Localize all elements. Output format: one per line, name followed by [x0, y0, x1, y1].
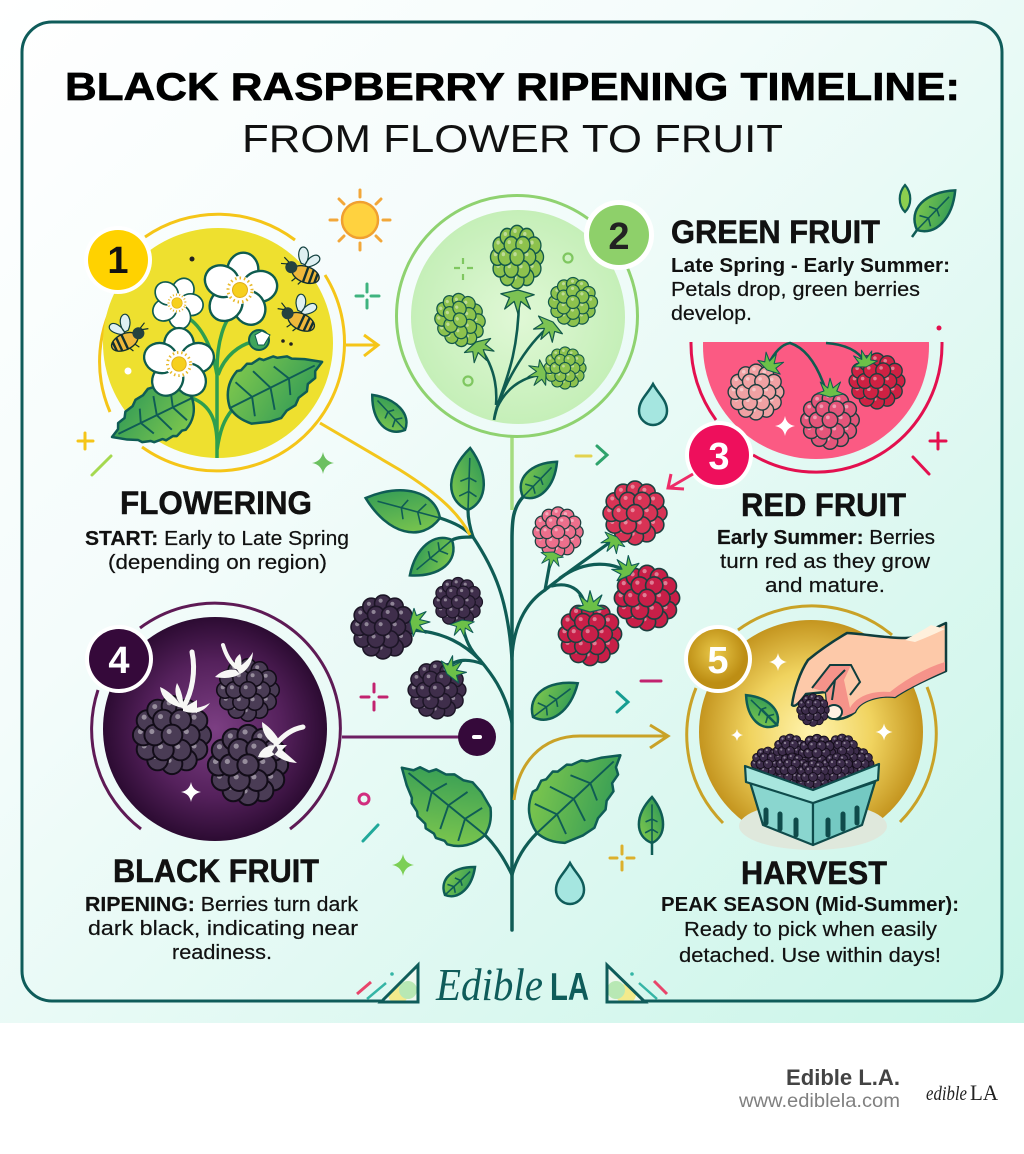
connector: tree to harvest — [514, 725, 668, 800]
title — [65, 66, 960, 161]
heading and text: black fruit: dark black, indicating near — [88, 917, 358, 940]
heading and text: red fruit: RED FRUIT — [741, 487, 906, 523]
pink half disc — [703, 342, 929, 459]
stems — [478, 300, 551, 420]
heading and text: red fruit: turn red as they grow — [720, 550, 930, 573]
footer credit: Edible L.A. — [786, 1065, 900, 1090]
heading and text: green fruit: Late Spring - Early Summer: — [671, 255, 950, 277]
badge 3: 3 — [708, 436, 730, 478]
heading and text: green fruit: Petals drop, green berries — [671, 278, 920, 301]
badge 1 — [84, 226, 152, 294]
bud — [249, 330, 269, 350]
bees — [276, 242, 327, 291]
icon: water drop — [639, 384, 667, 425]
berries — [490, 225, 544, 289]
green disc — [411, 210, 625, 424]
gold disc — [699, 620, 923, 820]
title: BLACK RASPBERRY RIPENING TIMELINE: — [65, 66, 960, 109]
heading and text: black fruit — [85, 853, 359, 964]
heading and text: harvest: Ready to pick when easily — [684, 918, 938, 941]
connector: flowering to tree — [320, 423, 470, 535]
heading and text: red fruit: Early Summer: Berries — [717, 526, 935, 549]
badge 5 — [684, 625, 752, 693]
heading and text: harvest: PEAK SEASON (Mid-Summer): — [661, 894, 959, 916]
shadow — [739, 802, 887, 850]
heading and text: green fruit: develop. — [671, 302, 752, 325]
tree red berries — [533, 481, 680, 666]
icon: leaves top right — [900, 180, 965, 239]
heading and text: flowering — [85, 485, 349, 574]
step 4: black fruit illustration — [92, 603, 340, 841]
heading and text: flowering: (depending on region) — [108, 551, 327, 574]
heading and text: harvest: detached. Use within days! — [679, 944, 941, 967]
purple disc — [103, 617, 327, 841]
arrow: step 3 to tree — [668, 474, 693, 489]
lower berry — [208, 725, 288, 805]
berries — [728, 364, 784, 420]
yellow disc — [103, 228, 333, 458]
footer logo — [926, 1080, 998, 1105]
heading and text: flowering: START: Early to Late Spring — [85, 527, 349, 550]
badge 4 — [85, 625, 153, 693]
step 2: green fruit illustration — [396, 196, 638, 436]
footer logo: LA — [970, 1080, 998, 1105]
left logo triangle — [381, 965, 418, 1004]
sparkles — [769, 653, 787, 671]
badge 5: 5 — [707, 640, 729, 682]
hand — [792, 623, 946, 719]
stems — [188, 315, 252, 458]
ring — [396, 196, 638, 436]
icon: sun — [330, 190, 390, 250]
heading and text: green fruit: GREEN FRUIT — [671, 214, 880, 250]
title: FROM FLOWER TO FRUIT — [242, 118, 783, 161]
icon: small leaf — [362, 387, 413, 439]
ring — [687, 606, 936, 823]
logo: Edible LA: LA — [550, 966, 589, 1009]
ring — [691, 342, 942, 472]
small leaf — [738, 688, 784, 734]
ring — [100, 214, 345, 471]
flowers — [194, 247, 285, 335]
upper berry — [217, 659, 279, 721]
basket — [745, 764, 879, 845]
connector: green fruit to tree — [510, 437, 514, 510]
picked berry — [797, 694, 829, 726]
step 3: red fruit illustration — [690, 342, 944, 474]
left berry — [133, 696, 211, 774]
connector: black fruit to tree — [342, 718, 496, 756]
logo: Edible LA — [356, 962, 668, 1004]
badge 2 — [584, 200, 654, 270]
basket berries — [751, 747, 785, 781]
badge 1: 1 — [107, 240, 129, 282]
badge 2: 2 — [608, 216, 630, 258]
badge 4: 4 — [108, 640, 130, 682]
heading and text: green fruit — [671, 214, 950, 325]
footer logo: edible — [926, 1083, 967, 1105]
right logo triangle — [607, 965, 645, 1004]
footer credit — [738, 1065, 900, 1112]
heading and text: black fruit: readiness. — [172, 941, 272, 964]
icon: water drop lower — [556, 863, 584, 904]
heading and text: harvest — [661, 855, 959, 967]
step 1: flowering illustration — [100, 214, 345, 471]
heading and text: black fruit: BLACK FRUIT — [113, 853, 319, 889]
heading and text: flowering: FLOWERING — [120, 485, 312, 521]
ring — [92, 603, 340, 829]
stems — [768, 343, 865, 388]
heading and text: black fruit: RIPENING: Berries turn dark — [85, 893, 359, 916]
tree black berries — [351, 578, 482, 719]
footer credit: www.ediblela.com — [738, 1090, 900, 1112]
heading and text: red fruit: and mature. — [765, 574, 885, 597]
badge 3 — [685, 421, 753, 489]
tree leaves — [360, 447, 663, 902]
leaves — [216, 333, 336, 437]
tree stems and branches — [412, 497, 632, 930]
heading and text: harvest: HARVEST — [741, 855, 887, 891]
arrow: step 1 to step 2 — [346, 335, 378, 356]
logo: Edible LA: Edible — [435, 959, 543, 1010]
heading and text: red fruit — [717, 487, 935, 597]
decorative accents — [78, 284, 946, 870]
step 5: harvest illustration — [687, 606, 946, 850]
